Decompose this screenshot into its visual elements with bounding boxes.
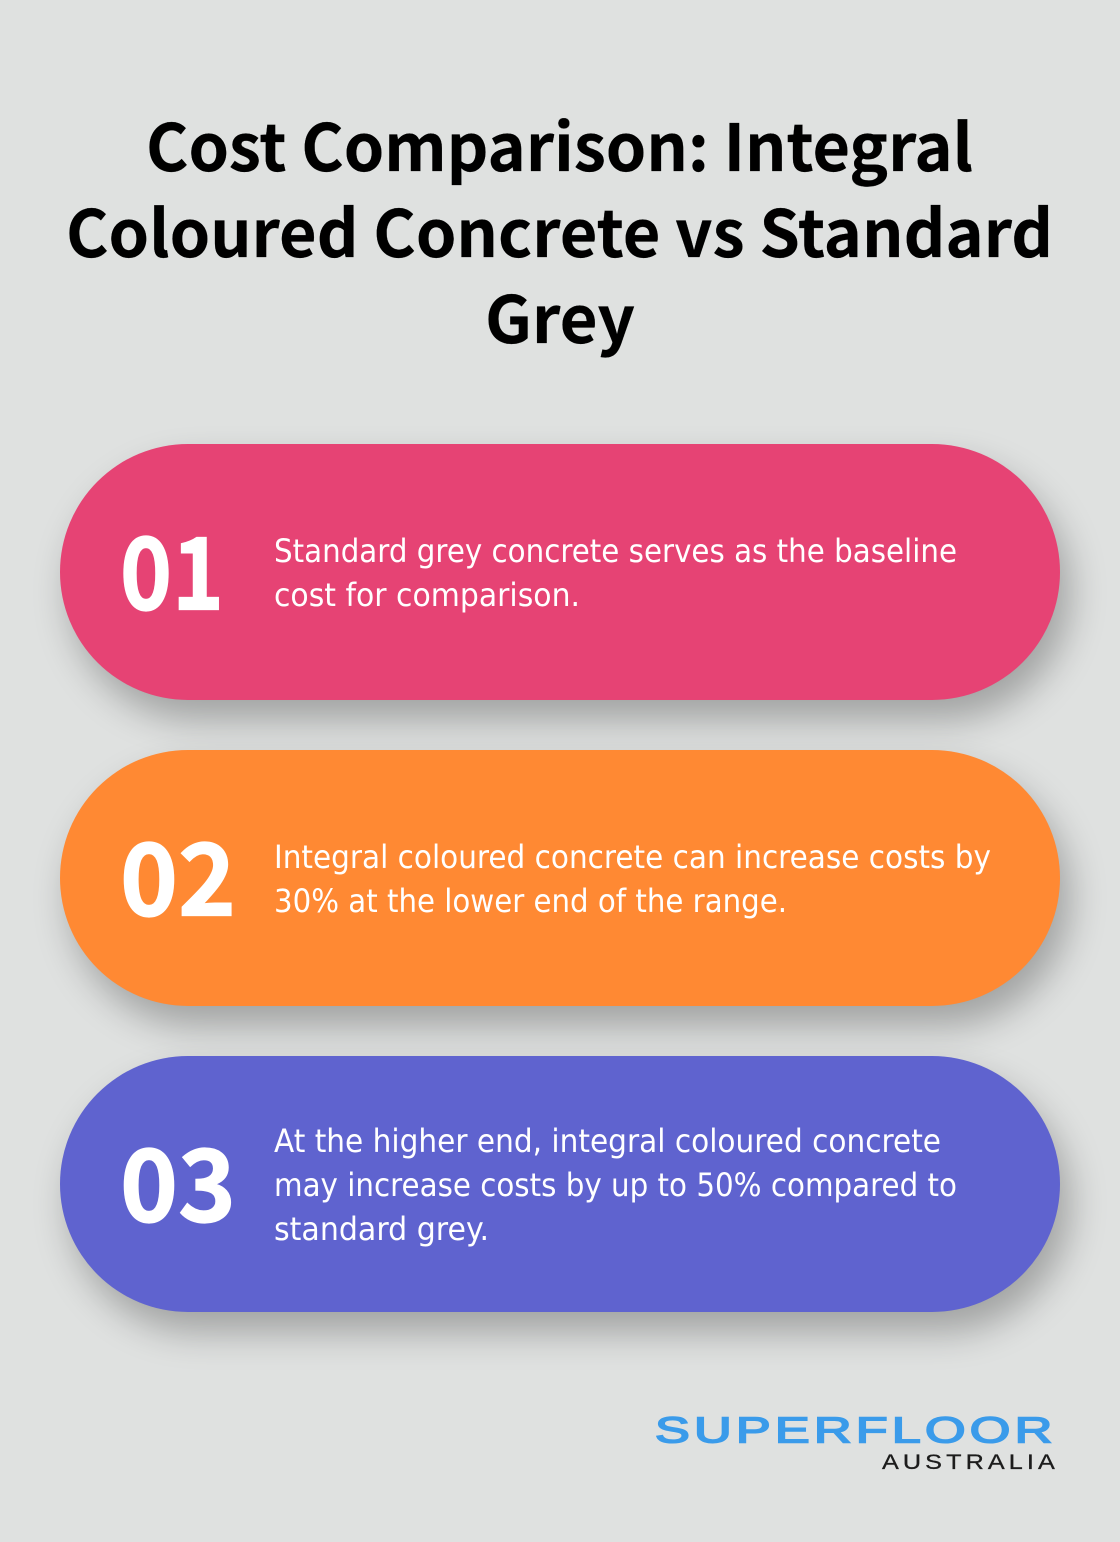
text: step 01 description: Standard grey concrete serves as the baseline (274, 532, 957, 570)
logo: Superfloor Australia: AUSTRALIA (882, 1450, 1055, 1474)
title (66, 96, 1053, 362)
panel: step 02 (60, 750, 1060, 1006)
logo: Superfloor Australia (655, 1410, 1055, 1474)
number 03: 03 (120, 1106, 236, 1250)
text: step 02 description: 30% at the lower end of the range. (274, 882, 787, 920)
text: step 03 description: may increase costs by up to 50% compared to (274, 1166, 957, 1204)
text: step 01 description (274, 532, 957, 614)
number 02: 02 (120, 800, 236, 944)
text: step 02 description (274, 838, 991, 920)
logo: Superfloor Australia: SUPERFLOOR (655, 1410, 1052, 1451)
panel: step 03 (60, 1056, 1060, 1312)
title: Grey (485, 268, 635, 362)
number 01: 01 (120, 494, 224, 638)
title: Cost Comparison: Integral (146, 96, 973, 190)
panel: step 01 (60, 444, 1060, 700)
text: step 01 description: cost for comparison. (274, 576, 580, 614)
text: step 03 description: At the higher end, integral coloured concrete (274, 1122, 941, 1160)
text: step 02 description: Integral coloured concrete can increase costs by (274, 838, 991, 876)
title: Coloured Concrete vs Standard (66, 182, 1053, 276)
text: step 03 description: standard grey. (274, 1210, 489, 1248)
text: step 03 description (274, 1122, 957, 1248)
